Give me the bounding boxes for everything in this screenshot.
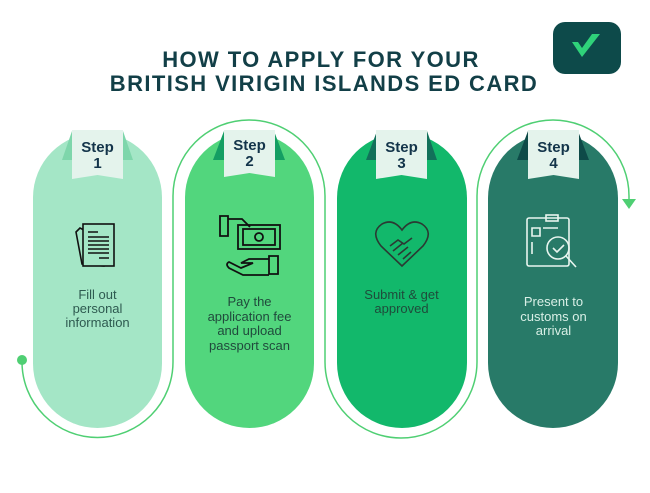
icon: payment <box>220 216 280 275</box>
step 1 tab: 1 <box>93 155 102 172</box>
text: step 2: Pay the <box>227 294 272 309</box>
icon: clipboard search <box>527 215 576 267</box>
text: step 1: information <box>65 315 130 330</box>
title: HOW TO APPLY FOR YOUR <box>162 47 480 72</box>
text: step 4: Present to <box>524 294 583 309</box>
step 2 tab: Step <box>233 137 266 154</box>
step 1 tab <box>62 130 133 179</box>
panel: step 3 <box>337 130 467 428</box>
text: step 3: approved <box>374 301 429 316</box>
text: step 3 <box>364 287 439 316</box>
step 4 tab: 4 <box>549 155 558 172</box>
title <box>110 47 538 96</box>
text: step 2: and upload <box>217 323 282 338</box>
text: step 2: application fee <box>208 309 291 324</box>
panel: step 2 <box>185 130 314 428</box>
step 3 tab: 3 <box>397 155 406 172</box>
step 3 tab: Step <box>385 139 418 156</box>
panel: step 4 <box>488 130 618 428</box>
text: step 2: passport scan <box>209 338 290 353</box>
step 4 tab <box>517 130 589 179</box>
text: step 2 <box>208 294 291 353</box>
step 2 tab <box>213 130 285 177</box>
panel: step 1 <box>33 130 162 428</box>
text: step 4: customs on <box>520 309 587 324</box>
title: BRITISH VIRIGIN ISLANDS ED CARD <box>110 71 538 96</box>
step 2 tab: 2 <box>245 153 254 170</box>
text: step 1 <box>65 287 130 330</box>
text: step 4 <box>520 294 587 338</box>
step 1 tab: Step <box>81 139 114 156</box>
icon: documents <box>76 224 114 266</box>
connector line arrow <box>17 120 636 438</box>
logo <box>553 22 621 74</box>
text: step 4: arrival <box>536 323 571 338</box>
step 3 tab <box>366 130 437 179</box>
text: step 3: Submit & get <box>364 287 439 302</box>
text: step 1: personal <box>73 301 123 316</box>
step 4 tab: Step <box>537 139 570 156</box>
icon: heart handshake <box>376 222 428 266</box>
text: step 1: Fill out <box>78 287 117 302</box>
